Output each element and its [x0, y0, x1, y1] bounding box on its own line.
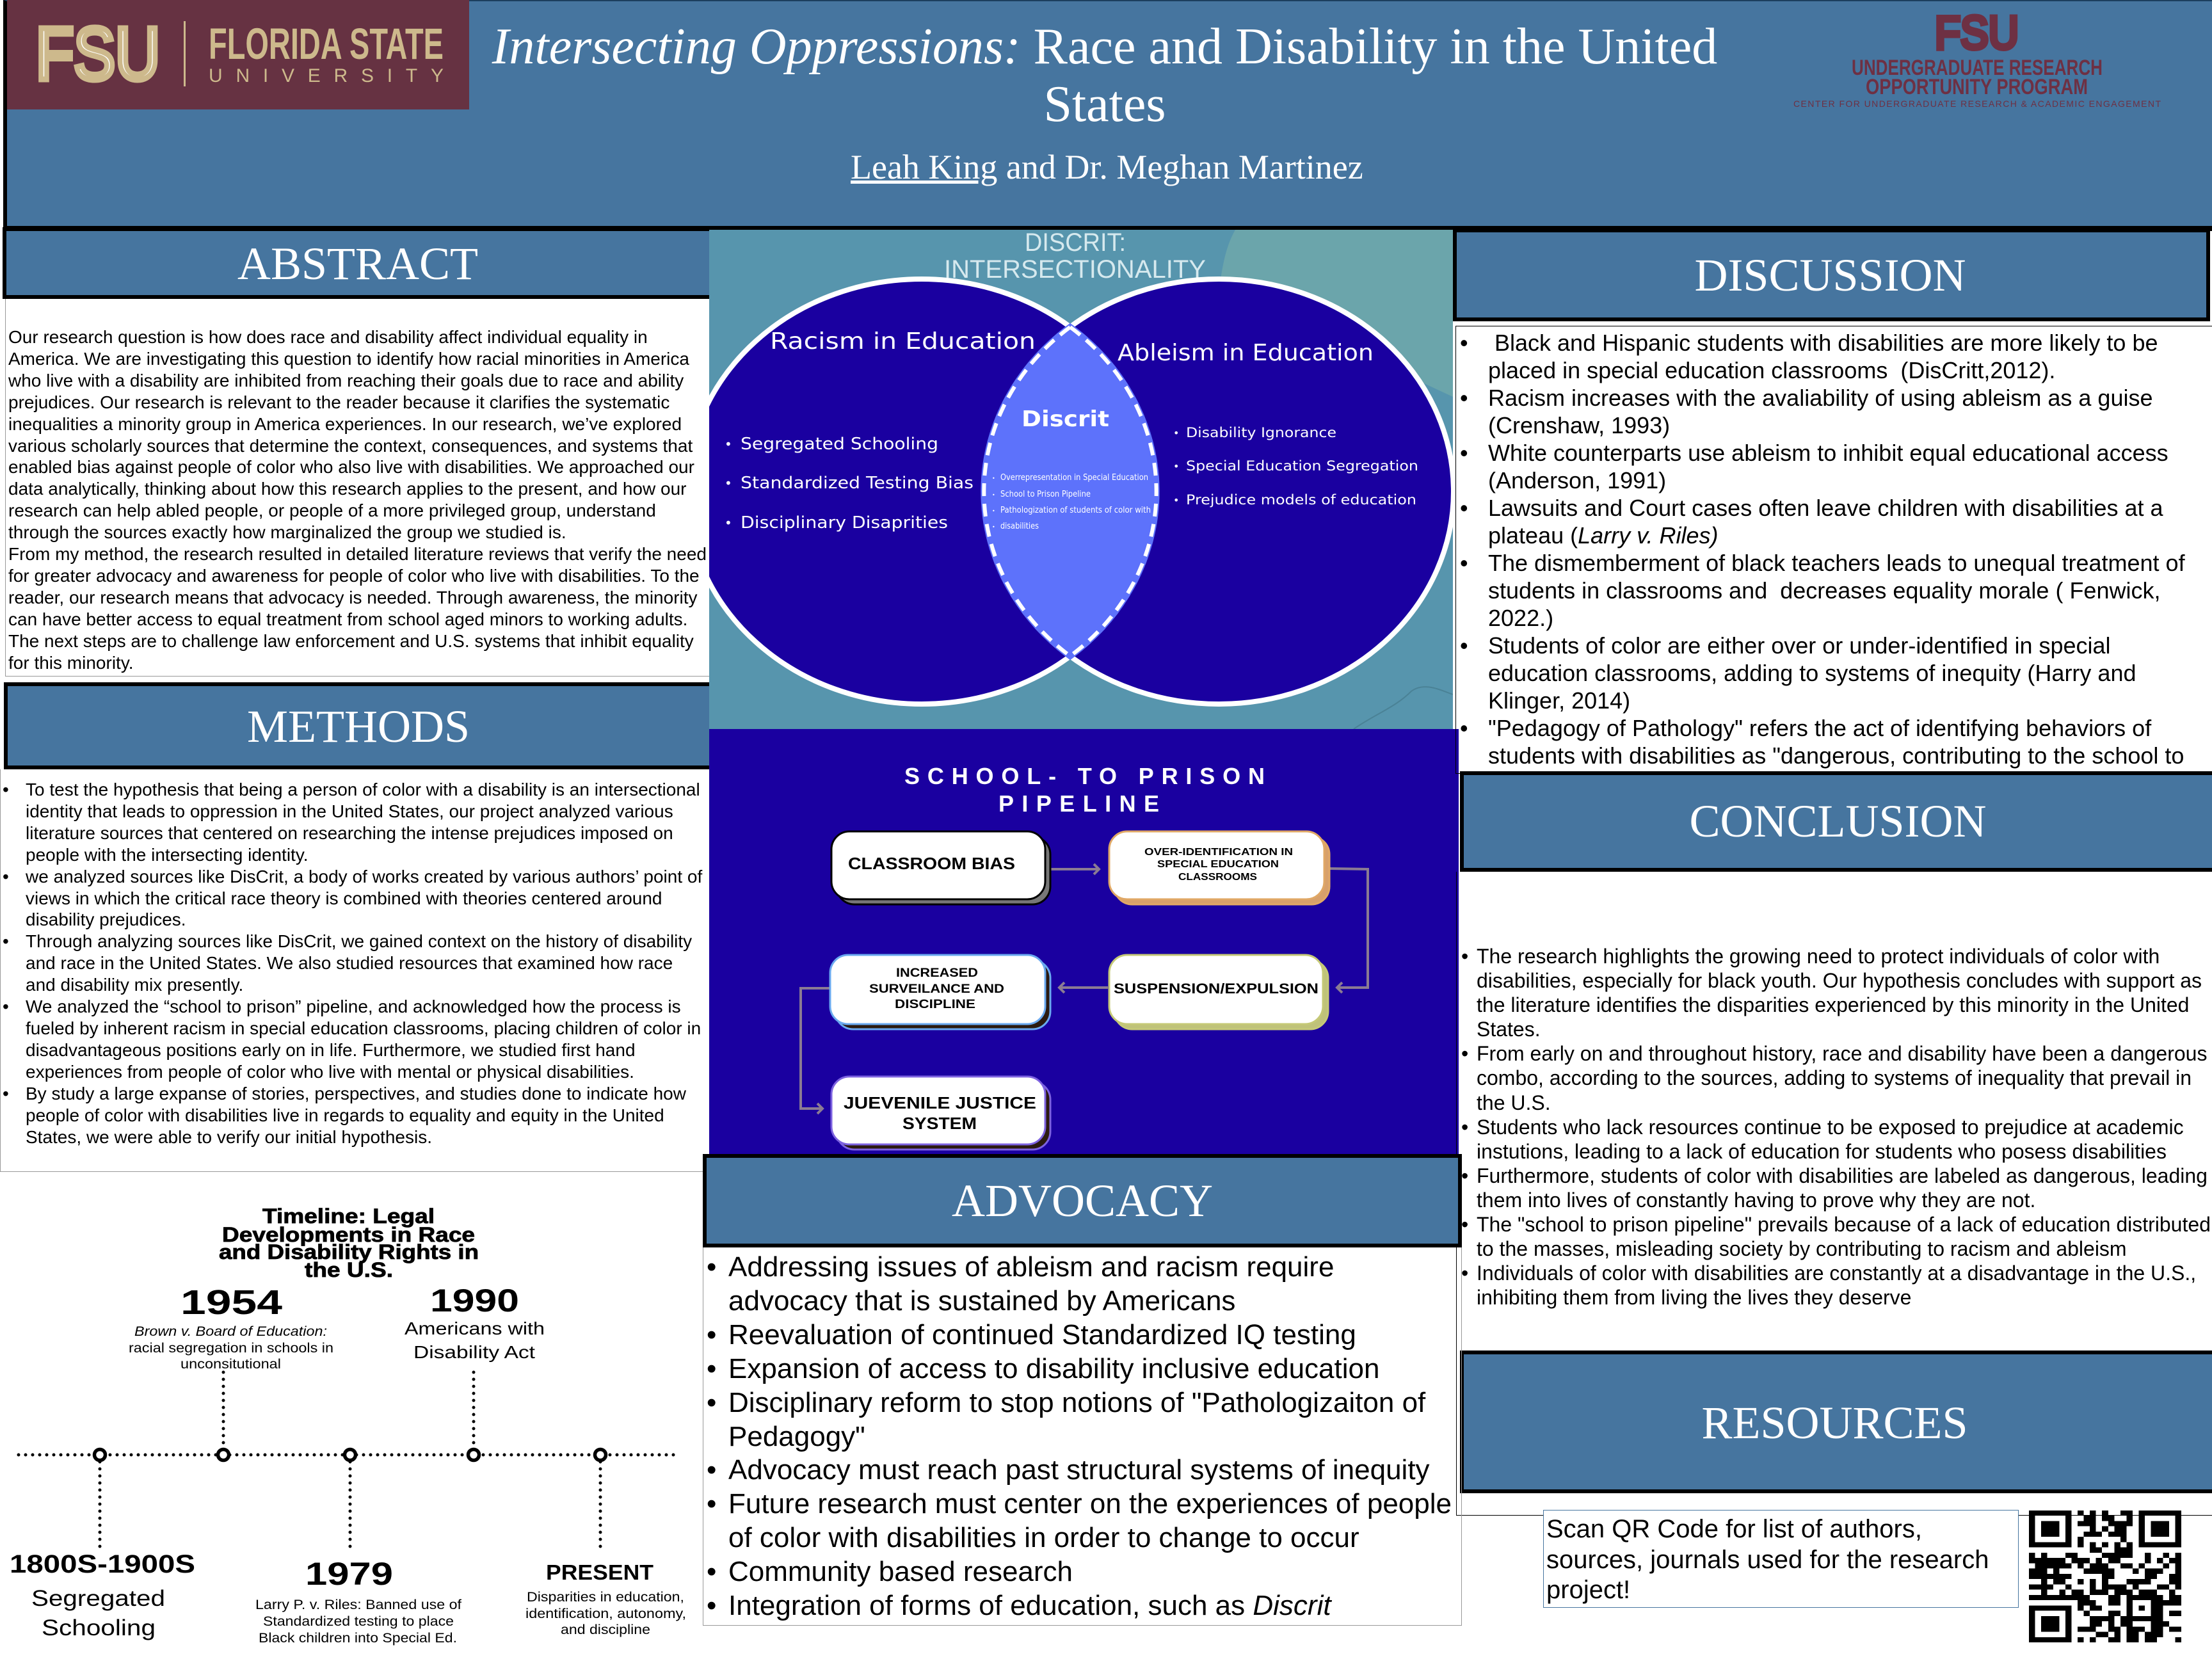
heading: methods: METHODS: [247, 701, 470, 752]
text: discrit overlap: Pathologization of students of color with: [1000, 506, 1151, 515]
text block: conclusion: instutions, leading to a lack of education for students who posess disabilities: [1477, 1140, 2167, 1163]
logo: Undergraduate Research Opportunity Program: UNDERGRADUATE RESEARCH: [1852, 56, 2103, 80]
event: 1990: [405, 1283, 545, 1362]
heading: methods: [4, 682, 713, 769]
text block: methods: identity that leads to oppression in the United States, our project analyzed various: [26, 801, 673, 821]
text block: conclusion: The "school to prison pipeline" prevails because of a lack of education distributed: [1477, 1213, 2211, 1236]
text: discrit overlap: Overrepresentation in Special Education: [1000, 473, 1148, 483]
event: 1954: 1954: [180, 1283, 282, 1322]
timeline axis and markers: [19, 1372, 678, 1553]
text block: methods: and disability mix presently.: [26, 975, 243, 995]
box: increased surveilance: DISCIPLINE: [895, 998, 975, 1011]
event: 1990: 1990: [430, 1283, 519, 1318]
event: 1800s-1900s: Schooling: [42, 1615, 156, 1640]
text block: abstract: research can help abled people, or people of a more privileged group, understand: [8, 501, 656, 520]
text box: scan QR code: project!: [1546, 1576, 1630, 1604]
text block: abstract: data analytically, thinking about how this research applies to the present, and how our: [8, 479, 686, 499]
timeline title: and Disability Rights in: [219, 1240, 479, 1263]
text block: abstract: America. We are investigating this question to identify how racial minorities in America: [8, 349, 689, 369]
text block: methods: By study a large expanse of stories, perspectives, and studies done to indicate how: [26, 1084, 686, 1103]
text: discrit overlap: •: [992, 508, 995, 514]
chart title: DisCrit intersectionality: INTERSECTIONALITY: [944, 255, 1206, 284]
text: discrit overlap: •: [992, 524, 995, 530]
text block: conclusion: inhibiting them from living the lives they deserve: [1477, 1286, 1911, 1309]
text block: abstract: inequalities a minority group in America experiences. In our research, we’ve explored: [8, 414, 682, 434]
text block: methods: States, we were able to verify our initial hypothesis.: [26, 1126, 432, 1147]
text block: advocacy: of color with disabilities in order to change to occur: [728, 1522, 1359, 1553]
text block: discussion: Lawsuits and Court cases often leave children with disabilities at a: [1488, 495, 2163, 521]
text: discrit overlap: •: [992, 476, 995, 481]
heading: discussion: DISCUSSION: [1694, 250, 1966, 301]
logo: Florida State University: [7, 0, 469, 109]
box: over-identification: CLASSROOMS: [1178, 872, 1257, 883]
text block: abstract: From my method, the research resulted in detailed literature reviews that verify the need: [8, 544, 707, 564]
text block: methods: [3, 780, 703, 1147]
event: 1800s-1900s: 1800S-1900S: [10, 1550, 195, 1578]
text block: conclusion: From early on and throughout history, race and disability have been a dangerous: [1477, 1042, 2207, 1065]
text: racism in education: Disciplinary Disaprities: [741, 513, 948, 533]
heading: abstract: [3, 227, 713, 299]
logo: Florida State University: UNIVERSITY: [209, 65, 444, 86]
text: ableism in education: [1118, 340, 1418, 508]
text block: discussion: placed in special education classrooms (DisCritt,2012).: [1488, 357, 2055, 383]
text block: abstract: various scholarly sources that determine the context, consequences, and systems that: [8, 436, 693, 456]
text block: conclusion: them into lives of constantly having to prove why they are not.: [1477, 1189, 2035, 1212]
text block: methods: people with the intersecting identity.: [26, 845, 309, 865]
event: 1800s-1900s: [10, 1550, 195, 1640]
text: discrit overlap: disabilities: [1000, 522, 1039, 531]
text block: conclusion: the U.S.: [1477, 1091, 1551, 1114]
event: 1979: 1979: [305, 1556, 393, 1592]
pipeline title: [904, 763, 1265, 817]
event: 1990: Disability Act: [413, 1342, 535, 1362]
text block: conclusion: the literature identifies the disparities experienced by this minority in the United: [1477, 993, 2189, 1016]
text box: scan QR code: Scan QR Code for list of authors,: [1546, 1515, 1922, 1543]
box: juevenile justice system: [831, 1077, 1050, 1150]
logo: Undergraduate Research Opportunity Program: OPPORTUNITY PROGRAM: [1866, 75, 2088, 99]
text block: conclusion: Students who lack resources continue to be exposed to prejudice at academic: [1477, 1116, 2184, 1139]
logo: Undergraduate Research Opportunity Program: CENTER FOR UNDERGRADUATE RESEARCH & ACADEMIC ENGAGEMENT: [1793, 99, 2161, 109]
text: racism in education: Racism in Education: [770, 328, 1036, 355]
text block: methods: we analyzed sources like DisCrit, a body of works created by various authors’ point of: [26, 867, 702, 886]
text: racism in education: [725, 328, 1036, 533]
text block: discussion: education classrooms, adding to systems of inequity (Harry and: [1488, 660, 2136, 686]
title: States: [1043, 76, 1166, 132]
text block: discussion: Students of color are either over or under-identified in special: [1488, 632, 2111, 659]
box: classroom bias: CLASSROOM BIAS: [848, 854, 1015, 873]
timeline title: [219, 1205, 479, 1281]
text block: methods: disadvantageous positions early on in life. Furthermore, we studied first hand: [26, 1040, 636, 1060]
text block: methods: and race in the United States. We also studied resources that examined how race: [26, 953, 673, 973]
chart title: DisCrit intersectionality: [944, 228, 1206, 284]
text block: methods: To test the hypothesis that being a person of color with a disability is an intersectional: [26, 780, 700, 799]
text block: discussion: students with disabilities as "dangerous, contributing to the school to: [1488, 742, 2184, 769]
logo: Florida State University: FSU: [36, 12, 160, 95]
arrows: [801, 864, 1368, 1114]
text block: advocacy: Reevaluation of continued Standardized IQ testing: [728, 1319, 1356, 1350]
text: racism in education: •: [725, 437, 732, 452]
box: suspension / expulsion: SUSPENSION/EXPULSION: [1114, 981, 1318, 997]
text block: methods: literature sources that centered on researching the intense prejudices imposed on: [26, 823, 673, 843]
timeline title: Developments in Race: [222, 1223, 475, 1246]
text: ableism in education: Prejudice models of education: [1186, 492, 1416, 508]
panel: header banner: [3, 0, 2212, 231]
text block: advocacy: Disciplinary reform to stop notions of "Pathologizaiton of: [728, 1387, 1425, 1418]
text: discrit overlap: [992, 406, 1151, 531]
text block: advocacy: Advocacy must reach past structural systems of inequity: [728, 1454, 1430, 1486]
heading: conclusion: [1460, 771, 2212, 872]
event: 1800s-1900s: Segregated: [31, 1586, 165, 1611]
text: ableism in education: Ableism in Education: [1118, 340, 1374, 366]
text: racism in education: Standardized Testing Bias: [741, 474, 974, 493]
title: Intersecting Oppressions: Race and Disability in the United: [492, 19, 1717, 75]
text block: abstract: reader, our research means that advocacy is needed. Through awareness, the minority: [8, 588, 698, 607]
box: over-identification: OVER-IDENTIFICATION IN: [1144, 847, 1293, 858]
pipeline title: PIPELINE: [998, 790, 1159, 817]
text block: advocacy: Community based research: [728, 1556, 1073, 1587]
heading: advocacy: ADVOCACY: [952, 1175, 1213, 1226]
text block: abstract: prejudices. Our research is relevant to the reader because it clarifies the systematic: [8, 392, 669, 412]
text block: methods: We analyzed the “school to prison” pipeline, and acknowledged how the process is: [26, 997, 681, 1016]
text block: discussion: (Crenshaw, 1993): [1488, 412, 1670, 438]
text block: discussion: (Anderson, 1991): [1488, 467, 1666, 493]
text block: discussion: Klinger, 2014): [1488, 687, 1630, 714]
text block: discussion: The dismemberment of black teachers leads to unequal treatment of: [1488, 550, 2185, 576]
event: 1954: unconsitutional: [180, 1357, 281, 1372]
heading: resources: RESOURCES: [1701, 1397, 1968, 1448]
text: discrit overlap: •: [992, 492, 995, 498]
text block: abstract: [8, 327, 707, 673]
text block: discussion: White counterparts use ableism to inhibit equal educational access: [1488, 440, 2168, 466]
panel: advocacy text: [703, 1247, 1462, 1626]
timeline title: Timeline: Legal: [262, 1205, 435, 1228]
text block: abstract: for greater advocacy and awareness for people of color who live with disabilities. To the: [8, 566, 700, 586]
text: discrit overlap: Discrit: [1022, 406, 1109, 432]
event: present: and discipline: [561, 1623, 650, 1637]
text block: discussion: plateau (Larry v. Riles): [1488, 522, 1718, 549]
text: ableism in education: Disability Ignorance: [1186, 425, 1336, 440]
text block: discussion: Racism increases with the avaliability of using ableism as a guise: [1488, 385, 2152, 411]
event: 1979: Larry P. v. Riles: Banned use of: [255, 1598, 461, 1612]
timeline title: the U.S.: [305, 1258, 393, 1281]
panel: abstract text: [5, 299, 712, 677]
text block: discussion: [1461, 330, 2185, 769]
heading: resources: [1460, 1350, 2212, 1493]
heading: advocacy: [703, 1154, 1462, 1247]
text block: advocacy: Future research must center on the experiences of people: [728, 1488, 1452, 1519]
text block: discussion: 2022.): [1488, 605, 1553, 631]
text: ableism in education: •: [1173, 460, 1179, 472]
text block: advocacy: Addressing issues of ableism and racism require: [728, 1251, 1334, 1283]
box: juevenile justice system: SYSTEM: [902, 1114, 977, 1133]
text block: conclusion: disabilities, especially for black youth. Our hypothesis concludes with support as: [1477, 969, 2202, 992]
box: increased surveilance: SURVEILANCE AND: [869, 982, 1004, 996]
text block: discussion: students in classrooms and decreases equality morale ( Fenwick,: [1488, 577, 2160, 604]
text block: abstract: who live with a disability are inhibited from reaching their goals due to race and ability: [8, 371, 684, 390]
text block: advocacy: [708, 1251, 1452, 1621]
text block: advocacy: advocacy that is sustained by Americans: [728, 1285, 1235, 1317]
heading: abstract: ABSTRACT: [237, 238, 478, 289]
text block: advocacy: Expansion of access to disability inclusive education: [728, 1353, 1379, 1384]
text: racism in education: Segregated Schooling: [741, 435, 938, 454]
event: 1954: racial segregation in schools in: [129, 1341, 333, 1356]
text block: abstract: Our research question is how does race and disability affect individual equality in: [8, 327, 648, 347]
text block: abstract: for this minority.: [8, 653, 134, 673]
event: 1979: Black children into Special Ed.: [259, 1631, 457, 1646]
event: 1954: [129, 1283, 333, 1372]
box: over-identification: [1109, 831, 1329, 904]
event: present: [525, 1560, 686, 1637]
text block: conclusion: combo, according to the sources, adding to systems of inequality that prevail in: [1477, 1066, 2192, 1089]
event: present: identification, autonomy,: [525, 1607, 686, 1621]
box: classroom bias: [831, 831, 1050, 904]
box: over-identification: SPECIAL EDUCATION: [1157, 859, 1279, 870]
logo: Undergraduate Research Opportunity Program: [1793, 10, 2161, 109]
panel: methods text: [0, 769, 712, 1172]
text: ableism in education: Special Education Segregation: [1186, 458, 1418, 474]
panel: DisCrit venn diagram: [709, 230, 1453, 729]
title: [492, 19, 1717, 132]
text block: abstract: through the sources exactly how marginalized the group we studied is.: [8, 522, 566, 542]
text box: scan QR code: [1543, 1510, 2019, 1608]
text block: conclusion: Furthermore, students of color with disabilities are labeled as dangerous, leading: [1477, 1164, 2208, 1187]
text: ableism in education: •: [1173, 494, 1179, 506]
venn: overlapping circles: [687, 279, 1454, 704]
box: increased surveilance: [830, 955, 1050, 1029]
text block: conclusion: States.: [1477, 1018, 1541, 1041]
event: present: Disparities in education,: [527, 1590, 684, 1605]
text: ableism in education: •: [1173, 427, 1179, 439]
text block: abstract: The next steps are to challenge law enforcement and U.S. systems that inhibit equality: [8, 631, 694, 651]
text block: abstract: can have better access to equal treatment from school aged minors to working adults.: [8, 609, 687, 629]
event: 1979: [255, 1556, 461, 1646]
heading: discussion: [1453, 228, 2210, 321]
panel: discussion text: [1455, 326, 2212, 774]
text block: advocacy: Integration of forms of education, such as Discrit: [728, 1590, 1331, 1621]
text block: abstract: enabled bias against people of color who also live with disabilities. We approached our: [8, 457, 694, 477]
text block: conclusion: to the masses, misleading society by contributing to racism and ableism: [1477, 1237, 2127, 1260]
text: discrit overlap: School to Prison Pipeline: [1000, 490, 1091, 499]
event: present: PRESENT: [546, 1560, 653, 1584]
event: 1954: Brown v. Board of Education:: [134, 1324, 327, 1339]
text box: scan QR code: sources, journals used for the research: [1546, 1545, 1989, 1573]
text: racism in education: •: [725, 476, 732, 491]
text block: methods: experiences from people of color who live with mental or physical disabilities.: [26, 1062, 634, 1082]
text block: discussion: Black and Hispanic students with disabilities are more likely to be: [1495, 330, 2158, 356]
icon: QR code: [2029, 1511, 2181, 1642]
box: suspension / expulsion: [1109, 955, 1328, 1029]
text block: advocacy: Pedagogy": [728, 1421, 865, 1452]
event: 1990: Americans with: [405, 1318, 545, 1338]
text block: methods: people of color with disabilities live in regards to equality and equity in the United: [26, 1105, 664, 1125]
box: juevenile justice system: JUEVENILE JUSTICE: [844, 1093, 1036, 1112]
authors: Leah King and Dr. Meghan Martinez: [851, 148, 1363, 186]
panel: conclusion text: [1456, 872, 2212, 1516]
text block: conclusion: Individuals of color with disabilities are constantly at a disadvantage in the U.S.,: [1477, 1262, 2196, 1285]
text block: conclusion: The research highlights the growing need to protect individuals of color with: [1477, 945, 2160, 968]
text block: methods: Through analyzing sources like DisCrit, we gained context on the history of disability: [26, 931, 692, 951]
text block: conclusion: [1462, 945, 2211, 1309]
heading: conclusion: CONCLUSION: [1689, 796, 1987, 847]
box: increased surveilance: INCREASED: [896, 966, 978, 980]
event: 1979: Standardized testing to place: [263, 1614, 454, 1629]
text: racism in education: •: [725, 515, 732, 531]
text block: methods: fueled by inherent racism in special education classrooms, placing children of color in: [26, 1018, 701, 1038]
panel: school to prison pipeline: [709, 729, 1459, 1154]
text block: discussion: "Pedagogy of Pathology" refers the act of identifying behaviors of: [1488, 715, 2151, 741]
text block: methods: disability prejudices.: [26, 910, 186, 929]
text block: methods: views in which the critical race theory is combined with theories centered around: [26, 888, 662, 908]
pipeline title: SCHOOL- TO PRISON: [904, 763, 1265, 789]
timeline: legal developments: [10, 1205, 686, 1646]
